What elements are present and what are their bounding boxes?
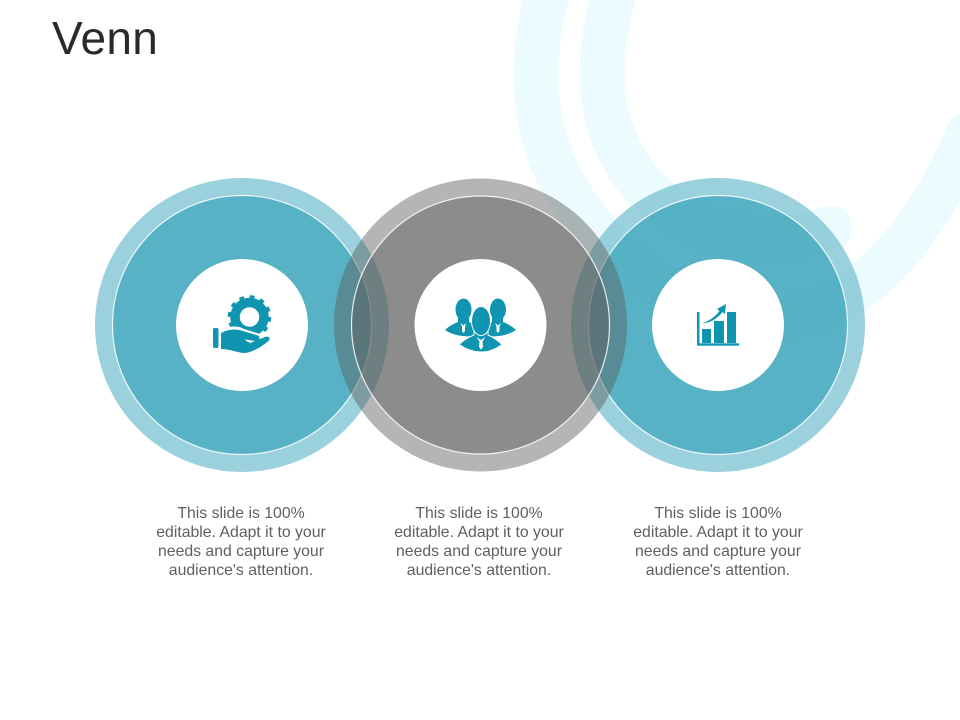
- icon: hand holding gear: [213, 298, 272, 357]
- text block: middle: This slide is 100%: [415, 505, 543, 522]
- circle: middle grey: [334, 178, 627, 472]
- white centre: middle: [414, 259, 546, 391]
- text block: right: This slide is 100%: [654, 505, 782, 522]
- back right person: [484, 298, 516, 336]
- veil softening swirl behind right circle: [571, 178, 865, 472]
- white centre: left: [176, 259, 308, 391]
- text block: right: needs and capture your: [635, 543, 801, 560]
- front person: [459, 306, 502, 352]
- background swirl: [536, 0, 960, 318]
- text block: middle: editable. Adapt it to your: [394, 524, 564, 541]
- text block: middle: [394, 505, 564, 579]
- text block: right: editable. Adapt it to your: [633, 524, 803, 541]
- text block: left: needs and capture your: [158, 543, 324, 560]
- circle: right teal: [571, 178, 865, 472]
- text block: middle: audience's attention.: [407, 562, 551, 579]
- icon: rising bar chart: [697, 304, 739, 346]
- text block: middle: needs and capture your: [396, 543, 562, 560]
- back left person: [445, 298, 477, 336]
- gear: [230, 298, 269, 336]
- white centre: right: [652, 259, 784, 391]
- text block: right: [633, 505, 803, 579]
- text block: left: audience's attention.: [169, 562, 313, 579]
- hand: [213, 326, 272, 357]
- icon: three business people: [445, 298, 516, 352]
- text block: left: This slide is 100%: [177, 505, 305, 522]
- text block: left: editable. Adapt it to your: [156, 524, 326, 541]
- circle: left teal: [95, 178, 389, 472]
- text block: left: [156, 505, 326, 579]
- text block: right: audience's attention.: [646, 562, 790, 579]
- title: Venn: [52, 12, 158, 64]
